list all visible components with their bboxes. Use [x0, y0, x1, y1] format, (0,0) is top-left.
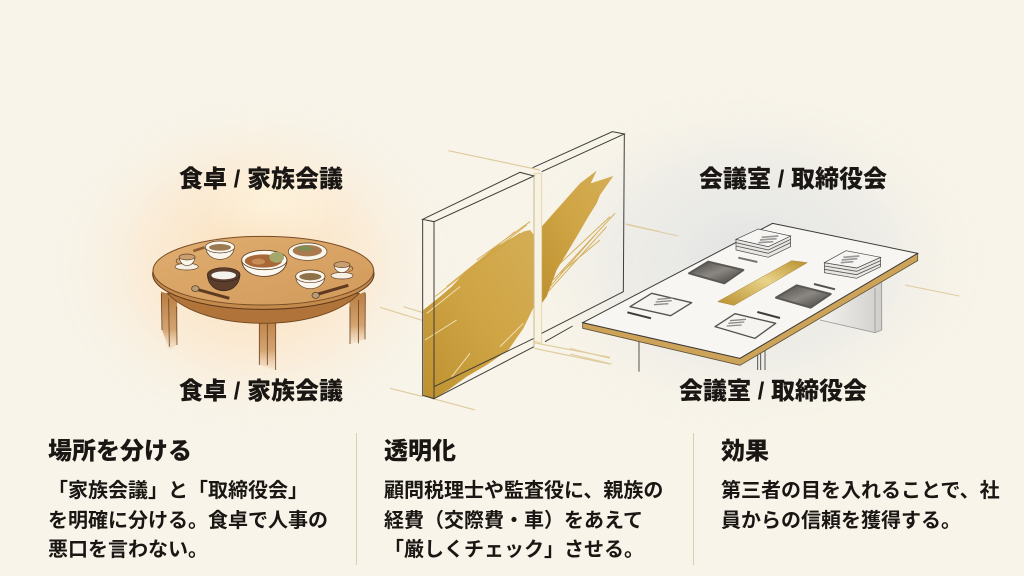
- column: separate places: [48, 438, 328, 561]
- right glass panel: [533, 132, 624, 342]
- body: transparency: [384, 480, 663, 561]
- dining table illustration: [153, 236, 374, 370]
- notepad front: [715, 312, 780, 338]
- table back support: [820, 282, 882, 333]
- tablet right: [776, 284, 835, 308]
- body: separate places: [48, 480, 328, 561]
- soup bowl right: [296, 270, 325, 289]
- rice bowl: [207, 268, 240, 291]
- document stack top: [736, 229, 791, 257]
- center gap post: [534, 173, 542, 343]
- body: transparency: 「厳しくチェック」させる。: [384, 539, 644, 561]
- tablet upper left: [689, 262, 743, 283]
- teacup left: [175, 254, 198, 270]
- heading: transparency: 透明化: [384, 438, 456, 465]
- soup bowl back: [205, 241, 235, 259]
- cool glow behind boardroom table: [510, 85, 990, 435]
- notepad left: [627, 293, 692, 318]
- heading: separate places: 場所を分ける: [48, 438, 192, 465]
- heading: effect: 効果: [721, 438, 769, 465]
- guide lines: [570, 225, 959, 364]
- table legs: [161, 292, 365, 370]
- table rim: [153, 239, 374, 309]
- body: separate places: 悪口を言わない。: [48, 539, 208, 561]
- cream highlight above dining table: [200, 150, 350, 250]
- chopsticks right: [312, 285, 348, 298]
- table front legs: [639, 342, 765, 372]
- body: effect: 員からの信頼を獲得する。: [721, 510, 961, 532]
- body: effect: 第三者の目を入れることで、社: [721, 480, 1000, 502]
- label: boardroom top: 会議室 / 取締役会: [699, 166, 887, 193]
- gold brush stroke: [423, 171, 615, 399]
- column: transparency: [384, 438, 663, 561]
- document stack right: [824, 251, 881, 278]
- label: boardroom bottom: 会議室 / 取締役会: [679, 378, 867, 405]
- body: transparency: 顧問税理士や監査役に、親族の: [384, 480, 663, 502]
- gold center strip: [718, 261, 807, 305]
- table gold edge: [583, 253, 918, 365]
- teacup right: [331, 262, 353, 279]
- table apron: [167, 293, 359, 323]
- side plate: [288, 243, 327, 260]
- body: transparency: 経費（交際費・車）をあえて: [384, 510, 643, 532]
- warm glow behind dining table: [50, 95, 460, 435]
- main bowl: [242, 250, 287, 276]
- chopsticks left: [192, 286, 229, 298]
- chopsticks back: [193, 247, 205, 251]
- table top: [153, 236, 374, 305]
- label: dining bottom: 食卓 / 家族会議: [179, 378, 343, 405]
- floor and guide lines: [380, 151, 660, 410]
- body: separate places: 「家族会議」と「取締役会」: [48, 480, 308, 502]
- glass panels illustration: [380, 132, 660, 410]
- boardroom table illustration: [570, 223, 959, 372]
- column: effect: [721, 438, 1000, 532]
- body: separate places: を明確に分ける。食卓で人事の: [48, 510, 328, 532]
- label: dining top: 食卓 / 家族会議: [179, 166, 343, 193]
- left glass panel: [423, 172, 534, 399]
- body: effect: [721, 480, 1000, 532]
- table top: [583, 223, 918, 358]
- pen top: [738, 258, 757, 262]
